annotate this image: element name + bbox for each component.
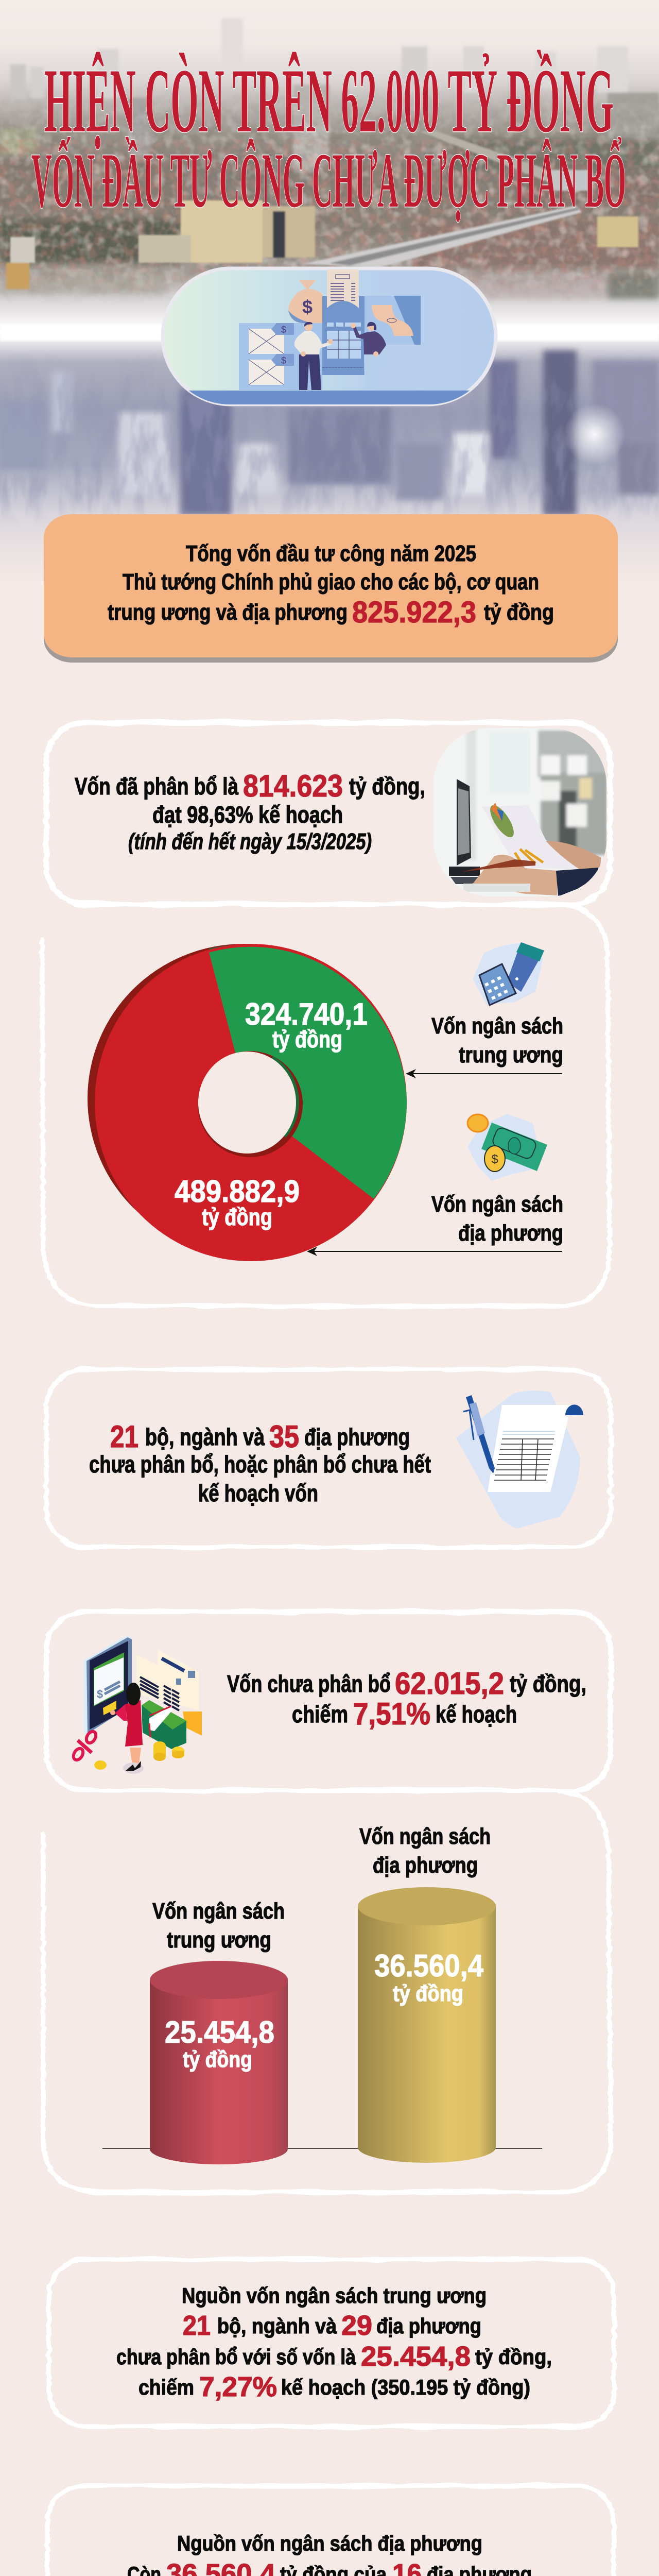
panel: central budget source (49, 2259, 614, 2427)
central budget text: kế hoạch (350.195 tỷ đồng) (281, 2375, 530, 2399)
unallocated capital text: 62.015,2 (395, 1666, 504, 1701)
total capital text: tỷ đồng (484, 600, 554, 625)
chart axis (102, 2148, 542, 2149)
header illustration pill (154, 268, 505, 406)
money bag (288, 280, 322, 323)
illustration: woman at payment screen: $ (97, 1688, 103, 1701)
central budget text (116, 2283, 552, 2402)
green value label (245, 997, 368, 1053)
photo: hands with report (433, 726, 608, 896)
ministries text: 35 (269, 1419, 299, 1454)
cylinder: central budget (150, 1961, 288, 2164)
total capital text: 825.922,3 (352, 596, 476, 629)
central budget text: địa phương (376, 2314, 481, 2338)
red value label: 489.882,9 (175, 1174, 300, 1209)
report page (482, 805, 580, 869)
envelopes (249, 323, 294, 385)
donut chart (88, 944, 407, 1261)
label: local budget (431, 1192, 563, 1246)
label: local budget: Vốn ngân sách (359, 1824, 491, 1849)
hands (472, 855, 557, 895)
central budget text: bộ, ngành và (217, 2314, 337, 2338)
illustration: woman at payment screen (72, 1636, 202, 1774)
local budget text: Nguồn vốn ngân sách địa phương (177, 2531, 482, 2555)
ministries text: 21 (110, 1419, 138, 1454)
cylinder: local budget: tỷ đồng (393, 1981, 463, 2006)
red value label: tỷ đồng (202, 1204, 272, 1230)
central budget text: 7,27% (199, 2371, 277, 2402)
cylinder: central budget: tỷ đồng (183, 2047, 252, 2072)
icon: banknote and coins: $ (491, 1153, 498, 1166)
laptop (457, 779, 471, 866)
total capital text: Thủ tướng Chính phủ giao cho các bộ, cơ quan (123, 569, 539, 595)
panel: donut chart allocated (42, 904, 610, 1306)
label: central budget: trung ương (167, 1927, 271, 1953)
green value label: 324.740,1 (245, 997, 368, 1031)
label: local budget: địa phương (458, 1221, 563, 1246)
ministries text: chưa phân bổ, hoặc phân bổ chưa hết (89, 1451, 431, 1478)
unallocated capital text (227, 1666, 586, 1731)
title (31, 49, 626, 224)
panel: total capital (44, 514, 618, 663)
allocated capital text: tỷ đồng, (349, 773, 425, 800)
central budget text: Nguồn vốn ngân sách trung ương (182, 2283, 487, 2308)
cylinder: local budget: 36.560,4 (374, 1948, 484, 1983)
cylinder: central budget: 25.454,8 (165, 2015, 274, 2049)
central budget text: chiếm (138, 2375, 194, 2399)
ministries text: địa phương (304, 1423, 410, 1450)
unallocated capital text: Vốn chưa phân bổ (227, 1670, 391, 1697)
man figure (294, 322, 333, 390)
label: central budget: Vốn ngân sách (431, 1013, 563, 1039)
icon: banknote and coins (467, 1114, 547, 1181)
allocated capital text: 814.623 (243, 769, 343, 803)
icon: document and pen (456, 1391, 583, 1529)
red value label (175, 1174, 300, 1230)
city photo background (0, 18, 659, 526)
cylinder: local budget (358, 1887, 496, 2163)
label: local budget: Vốn ngân sách (431, 1192, 563, 1217)
local budget text (127, 2531, 532, 2576)
total capital text (108, 541, 554, 629)
money bag: $ (302, 296, 313, 317)
banknote (372, 305, 413, 336)
envelopes: $ (281, 355, 286, 366)
woman figure (351, 321, 386, 375)
receipt (327, 269, 359, 308)
allocated capital text: (tính đến hết ngày 15/3/2025) (128, 829, 372, 854)
label: local budget (359, 1824, 491, 1878)
central budget text: 25.454,8 (361, 2341, 471, 2372)
allocated capital text (75, 769, 425, 854)
green value label: tỷ đồng (272, 1026, 342, 1053)
total capital text: Tống vốn đầu tư công năm 2025 (186, 541, 476, 566)
unallocated capital text: kế hoạch (436, 1701, 517, 1727)
arrow: local budget (307, 1247, 562, 1256)
icon: calculator and wallet (473, 942, 544, 1005)
panel: ministries and localities (46, 1369, 611, 1547)
ministries text (89, 1419, 431, 1506)
unallocated capital text: 7,51% (353, 1697, 430, 1731)
panel: cylinder chart (43, 1791, 611, 2192)
label: central budget: trung ương (459, 1042, 563, 1067)
label: central budget (431, 1013, 563, 1067)
ministries text: bộ, ngành và (145, 1423, 265, 1450)
allocated capital text: đạt 98,63% kế hoạch (152, 801, 343, 828)
keypad (322, 323, 363, 367)
unallocated capital text: chiếm (292, 1701, 348, 1727)
label: local budget: địa phương (373, 1853, 478, 1878)
ministries text: kế hoạch vốn (198, 1480, 318, 1506)
label: central budget: Vốn ngân sách (152, 1899, 285, 1924)
central budget text: 21 (183, 2310, 211, 2341)
panel: local budget source (47, 2486, 614, 2576)
label: central budget (152, 1899, 285, 1953)
total capital text: trung ương và địa phương (108, 600, 348, 625)
central budget text: tỷ đồng, (475, 2345, 552, 2369)
allocated capital text: Vốn đã phân bổ là (75, 773, 238, 800)
panel: unallocated capital (46, 1612, 611, 1790)
central budget text: 29 (341, 2310, 372, 2341)
envelopes: $ (281, 325, 286, 335)
central budget text: chưa phân bổ với số vốn là (116, 2345, 356, 2369)
arrow: central budget (406, 1069, 562, 1078)
panel: allocated capital (46, 723, 610, 904)
unallocated capital text: tỷ đồng, (510, 1670, 586, 1697)
